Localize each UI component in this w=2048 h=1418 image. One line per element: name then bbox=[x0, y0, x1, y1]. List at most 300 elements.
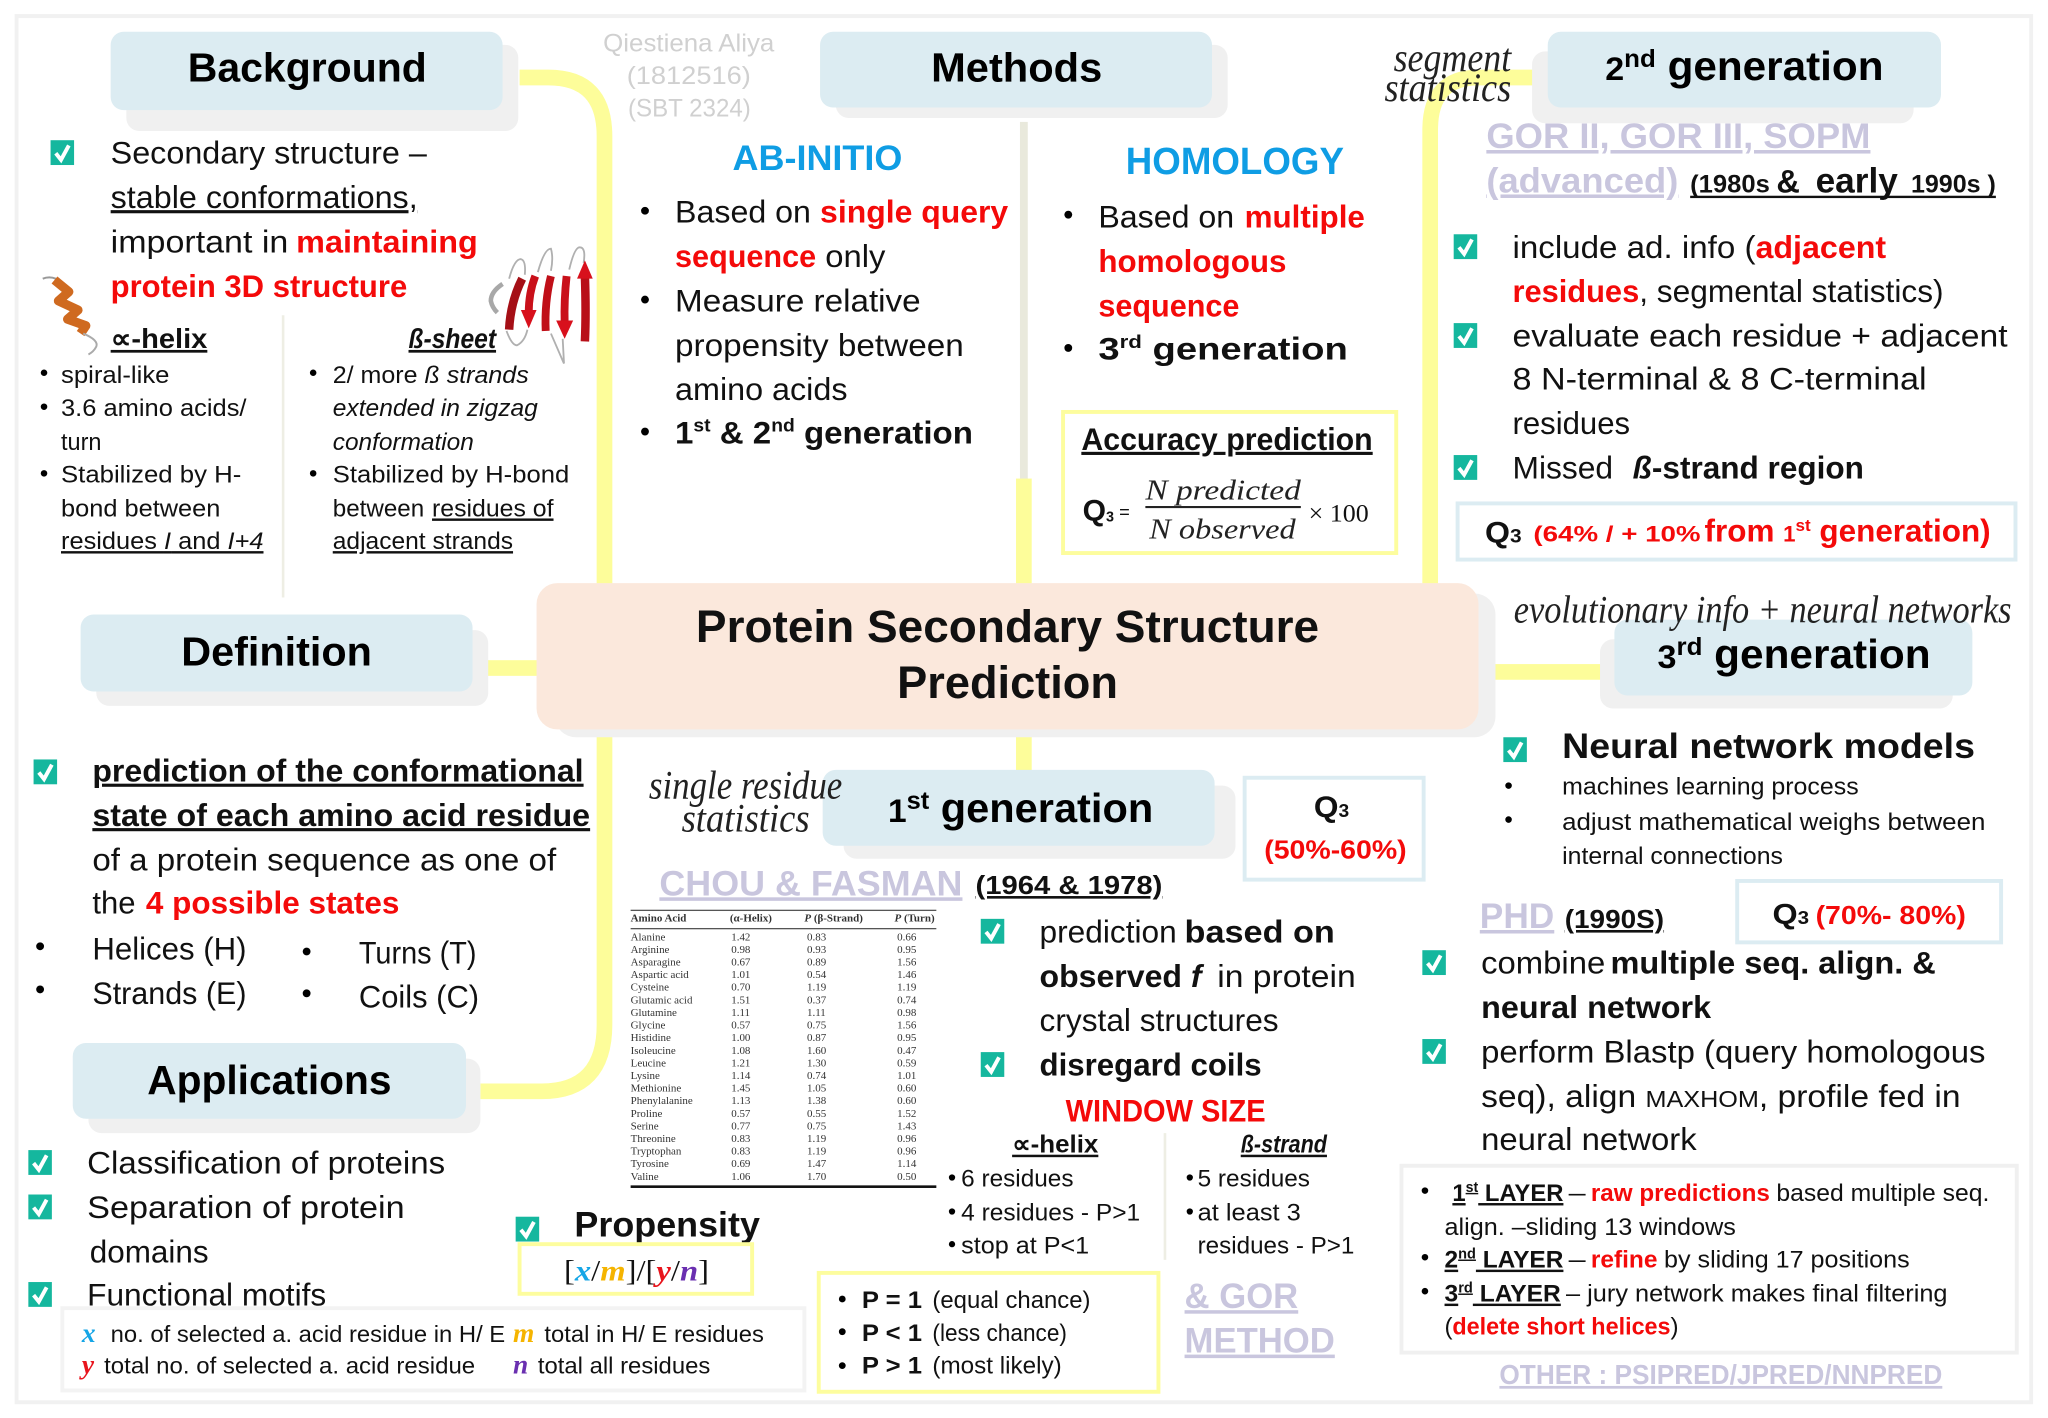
connector: background to centre bbox=[520, 77, 604, 587]
table: amino acid propensities: 0.95 bbox=[897, 1032, 917, 1044]
callout: Q3 PHD: Q3 bbox=[1772, 899, 1809, 931]
window size: beta strand: ß-strand bbox=[1241, 1132, 1328, 1159]
method names: GOR: early bbox=[1816, 161, 1898, 200]
callout: Q3 second generation bbox=[1458, 503, 2015, 560]
ab-initio column: & 2 bbox=[711, 415, 771, 450]
table: amino acid propensities: 1.19 bbox=[897, 982, 917, 994]
text block: secondary structure: protein 3D structure bbox=[111, 269, 407, 304]
table: amino acid propensities: 0.95 bbox=[897, 944, 917, 956]
table: amino acid propensities: 1.43 bbox=[897, 1120, 917, 1132]
window size: alpha helix bbox=[949, 1132, 1140, 1259]
table: amino acid propensities: 1.56 bbox=[897, 1020, 917, 1032]
connector: applications to centre bbox=[480, 724, 604, 1091]
table: amino acid propensities: Tyrosine bbox=[631, 1158, 669, 1170]
table: amino acid propensities: 0.74 bbox=[807, 1070, 827, 1082]
script note: segment statistics bbox=[1384, 35, 1513, 110]
table: amino acid propensities: Threonine bbox=[631, 1133, 676, 1145]
beta sheet column: ß-sheet bbox=[409, 323, 498, 354]
table: amino acid propensities: 1.06 bbox=[731, 1171, 751, 1183]
window size: alpha helix: 6 residues bbox=[961, 1166, 1074, 1193]
panel: network layers: delete short helices bbox=[1452, 1313, 1671, 1340]
icon: checkbox bbox=[1454, 234, 1477, 259]
alpha helix column: Stabilized by H- bbox=[61, 461, 241, 488]
panel: network layers: LAYER bbox=[1473, 1281, 1561, 1308]
callout: P value meaning: P = 1 bbox=[862, 1287, 922, 1314]
legend: propensity variables: total no. of selected a. acid residue bbox=[104, 1352, 475, 1378]
alpha helix column bbox=[41, 323, 264, 555]
callout: accuracy prediction: N observed bbox=[1148, 514, 1296, 546]
beta sheet column: residues of bbox=[432, 495, 554, 522]
ab-initio column: only bbox=[825, 239, 886, 274]
text block: applications list: Classification of proteins bbox=[87, 1146, 445, 1181]
text block: first generation points: observed f bbox=[1040, 959, 1205, 994]
panel: network layers: rd bbox=[1458, 1280, 1473, 1296]
text block: definition: prediction of the conformational bbox=[92, 754, 584, 789]
text block: applications list: domains bbox=[90, 1234, 209, 1269]
table: amino acid propensities: Phenylalanine bbox=[631, 1095, 693, 1107]
ab-initio column: propensity between bbox=[675, 328, 964, 363]
callout: P value meaning: P > 1 bbox=[862, 1352, 922, 1379]
method names: GOR method bbox=[1185, 1277, 1335, 1361]
icon: checkbox bbox=[51, 140, 74, 165]
panel: network layers: LAYER bbox=[1478, 1180, 1563, 1207]
text block: PHD points: neural network bbox=[1481, 990, 1712, 1025]
method names: GOR: (advanced) bbox=[1486, 161, 1678, 200]
callout: P value meaning: (most likely) bbox=[932, 1352, 1062, 1379]
table: amino acid propensities: Glutamine bbox=[631, 1007, 677, 1019]
text block: applications list: Functional motifs bbox=[87, 1278, 326, 1313]
table: amino acid propensities: 1.01 bbox=[731, 969, 750, 981]
legend: propensity variables: total in H/ E residues bbox=[544, 1321, 764, 1347]
beta sheet column: 2/ more ß strands bbox=[333, 362, 529, 389]
heading: first generation: generation bbox=[929, 785, 1153, 831]
table: amino acid propensities: 1.19 bbox=[807, 1146, 827, 1158]
table: amino acid propensities: Histidine bbox=[631, 1032, 671, 1044]
heading: second generation bbox=[1532, 32, 1941, 123]
table: amino acid propensities: 0.57 bbox=[731, 1020, 751, 1032]
panel: network layers: align. –sliding 13 windows bbox=[1445, 1214, 1736, 1241]
table: amino acid propensities: P bbox=[895, 912, 902, 924]
table: amino acid propensities: Asparagine bbox=[631, 956, 681, 968]
panel: propensity bbox=[516, 1205, 760, 1294]
window size: beta strand: 5 residues bbox=[1198, 1166, 1310, 1193]
table: amino acid propensities: 0.83 bbox=[731, 1133, 751, 1145]
panel: network layers: based multiple seq. bbox=[1776, 1180, 1989, 1207]
method names: GOR: (1980s bbox=[1690, 171, 1770, 198]
icon: checkbox bbox=[1422, 1039, 1446, 1064]
formula: propensity bbox=[520, 1244, 752, 1294]
panel: network layers: st bbox=[1466, 1180, 1478, 1196]
method names: Chou and Fasman bbox=[659, 864, 1162, 903]
table: amino acid propensities: 0.89 bbox=[807, 956, 827, 968]
text block: PHD points bbox=[1481, 946, 1985, 1157]
text block: definition: the bbox=[92, 886, 135, 921]
icon: checkbox bbox=[1503, 737, 1527, 762]
callout: Q3 second generation: generation) bbox=[1811, 513, 1991, 548]
script note: single residue statistics: single residue bbox=[649, 763, 842, 808]
author attribution bbox=[603, 30, 775, 123]
text block: neural network models: machines learning process bbox=[1562, 774, 1859, 801]
heading: second generation: generation bbox=[1656, 43, 1884, 89]
panel: network layers: raw predictions bbox=[1591, 1180, 1770, 1207]
table: amino acid propensities: 1.56 bbox=[897, 956, 917, 968]
table: amino acid propensities: 0.50 bbox=[897, 1171, 917, 1183]
text block: PHD points: perform Blastp (query homologous bbox=[1481, 1035, 1985, 1070]
table: amino acid propensities: 0.60 bbox=[897, 1083, 917, 1095]
table: amino acid propensities: 1.51 bbox=[731, 994, 750, 1006]
callout: Q3 second generation: from 1 bbox=[1705, 513, 1795, 548]
text block: applications list bbox=[87, 1146, 445, 1313]
panel: background bbox=[41, 32, 593, 597]
alpha helix column: bond between bbox=[61, 495, 220, 522]
legend: propensity variables: x bbox=[81, 1318, 96, 1348]
panel: network layers: – jury network makes final filtering bbox=[1566, 1281, 1948, 1308]
table: amino acid propensities: 0.75 bbox=[807, 1020, 827, 1032]
central title panel bbox=[537, 583, 1495, 737]
table: amino acid propensities: 1.13 bbox=[731, 1095, 751, 1107]
icon: checkbox bbox=[1454, 323, 1477, 348]
text block: second generation points: , segmental statistics) bbox=[1639, 274, 1944, 309]
callout: P value meaning: (less chance) bbox=[932, 1320, 1067, 1347]
text block: PHD points: multiple seq. align. & bbox=[1610, 946, 1936, 981]
legend: propensity variables: total all residues bbox=[538, 1352, 710, 1378]
callout: P value meaning: P < 1 bbox=[862, 1320, 922, 1347]
window size: alpha helix: 4 residues - P>1 bbox=[961, 1200, 1140, 1227]
table: amino acid propensities: 0.60 bbox=[897, 1095, 917, 1107]
callout: accuracy prediction: N predicted bbox=[1144, 474, 1302, 506]
ab-initio column bbox=[641, 139, 1009, 450]
ab-initio column: Based on bbox=[675, 195, 811, 230]
table: amino acid propensities: 1.14 bbox=[897, 1158, 917, 1170]
table: amino acid propensities: 1.52 bbox=[897, 1108, 916, 1120]
table: amino acid propensities: 1.21 bbox=[731, 1057, 750, 1069]
callout: accuracy prediction bbox=[1063, 412, 1396, 553]
table: amino acid propensities: 1.38 bbox=[807, 1095, 827, 1107]
homology column: 3 bbox=[1098, 332, 1116, 367]
table: amino acid propensities: 1.60 bbox=[807, 1045, 827, 1057]
callout: accuracy prediction: 3 bbox=[1106, 510, 1114, 526]
method names: GOR method: METHOD bbox=[1185, 1322, 1335, 1361]
panel: network layers: 2 bbox=[1445, 1247, 1458, 1274]
panel: first generation bbox=[631, 763, 1424, 1392]
ab-initio column: sequence bbox=[675, 239, 816, 274]
table: amino acid propensities: 0.87 bbox=[807, 1032, 827, 1044]
table: amino acid propensities: Methionine bbox=[631, 1083, 681, 1095]
panel: second generation bbox=[1384, 32, 2015, 560]
homology column: Based on bbox=[1098, 200, 1234, 235]
icon: checkbox bbox=[34, 759, 57, 784]
panel: methods bbox=[641, 32, 1396, 553]
text block: second generation points: residues bbox=[1512, 406, 1630, 441]
icon: checkbox bbox=[1454, 455, 1477, 480]
table: amino acid propensities: Lysine bbox=[631, 1070, 660, 1082]
ab-initio column: 1 bbox=[675, 415, 692, 450]
table: amino acid propensities: Tryptophan bbox=[631, 1146, 682, 1158]
beta sheet column bbox=[310, 323, 569, 555]
script note: segment statistics: segment bbox=[1394, 35, 1513, 80]
table: amino acid propensities: 0.55 bbox=[807, 1108, 827, 1120]
icon: checkbox bbox=[981, 919, 1004, 944]
author attribution: Qiestiena Aliya bbox=[603, 30, 775, 57]
list: four states: Helices (H) bbox=[92, 931, 247, 966]
legend: propensity variables: no. of selected a. acid residue in H/ E bbox=[111, 1321, 505, 1347]
table: amino acid propensities: (α-Helix) bbox=[730, 912, 772, 924]
table: amino acid propensities: 1.46 bbox=[897, 969, 917, 981]
formula: propensity: [x/m]/[y/n] bbox=[564, 1255, 709, 1288]
table: amino acid propensities: 0.93 bbox=[807, 944, 827, 956]
callout: Q3 first generation: (50%-60%) bbox=[1264, 835, 1407, 865]
legend: propensity variables: y bbox=[79, 1349, 95, 1379]
label: propensity: Propensity bbox=[574, 1205, 760, 1244]
table: amino acid propensities: 0.74 bbox=[897, 994, 917, 1006]
table: amino acid propensities: 1.08 bbox=[731, 1045, 751, 1057]
homology column bbox=[1064, 141, 1365, 367]
icon: checkbox bbox=[28, 1282, 52, 1307]
beta sheet column: adjacent strands bbox=[333, 528, 513, 555]
panel: definition bbox=[34, 614, 590, 1015]
text block: definition bbox=[92, 754, 590, 921]
text block: first generation points: based on bbox=[1185, 914, 1335, 949]
table: amino acid propensities: P bbox=[804, 912, 811, 924]
table: amino acid propensities: Alanine bbox=[631, 931, 665, 943]
panel: network layers: nd bbox=[1458, 1247, 1476, 1263]
text block: first generation points: in protein bbox=[1217, 959, 1356, 994]
panel: network layers bbox=[1401, 1166, 2017, 1353]
beta sheet column: Stabilized by H-bond bbox=[333, 461, 569, 488]
table: amino acid propensities: Serine bbox=[631, 1120, 659, 1132]
callout: P value meaning: (equal chance) bbox=[932, 1287, 1090, 1314]
text block: secondary structure: important in bbox=[111, 225, 288, 260]
ab-initio column: AB-INITIO bbox=[733, 139, 902, 178]
method names: GOR bbox=[1486, 117, 1996, 200]
method names: GOR method: & GOR bbox=[1185, 1277, 1298, 1316]
method names: GOR: & bbox=[1776, 162, 1800, 199]
text block: secondary structure bbox=[111, 136, 478, 304]
method name: PHD: (1990S) bbox=[1565, 904, 1664, 934]
ab-initio column: nd bbox=[771, 415, 795, 436]
table: amino acid propensities: 0.77 bbox=[731, 1120, 751, 1132]
icon: checkbox bbox=[1422, 950, 1446, 975]
connector: third generation to centre bbox=[1489, 664, 1613, 680]
text block: first generation points bbox=[1040, 914, 1356, 1083]
heading: background: Background bbox=[188, 44, 427, 90]
table: amino acid propensities: 1.11 bbox=[807, 1007, 826, 1019]
heading: third generation: 3 bbox=[1658, 638, 1676, 675]
table: amino acid propensities: 1.11 bbox=[731, 1007, 750, 1019]
heading: first generation: st bbox=[907, 788, 929, 815]
panel: network layers: LAYER bbox=[1476, 1247, 1563, 1274]
window size: beta strand: residues - P>1 bbox=[1198, 1232, 1354, 1259]
alpha helix column: spiral-like bbox=[61, 362, 169, 389]
panel: network layers: by sliding 17 positions bbox=[1664, 1247, 1910, 1274]
list: four states: Turns (T) bbox=[359, 935, 476, 970]
heading: third generation bbox=[1600, 620, 1972, 709]
table: amino acid propensities: Glycine bbox=[631, 1020, 665, 1032]
table: amino acid propensities: 0.47 bbox=[897, 1045, 917, 1057]
heading: second generation: 2 bbox=[1605, 50, 1624, 87]
homology column: generation bbox=[1142, 332, 1348, 367]
table: amino acid propensities: Leucine bbox=[631, 1057, 666, 1069]
homology column: sequence bbox=[1098, 289, 1239, 324]
panel: network layers: 3 bbox=[1445, 1281, 1458, 1308]
text block: second generation points: include ad. info ( bbox=[1512, 230, 1756, 265]
icon: checkbox bbox=[28, 1150, 52, 1175]
homology column: rd bbox=[1120, 331, 1142, 352]
icon: checkbox bbox=[28, 1195, 52, 1219]
text block: secondary structure: stable conformations, bbox=[111, 180, 418, 215]
legend: propensity variables: n bbox=[513, 1349, 528, 1379]
alpha helix column: residues I and I+4 bbox=[61, 528, 264, 555]
callout: accuracy prediction: Q bbox=[1083, 494, 1106, 527]
table: amino acid propensities: 0.57 bbox=[731, 1108, 751, 1120]
callout: Q3 second generation: (64% / + 10% bbox=[1533, 521, 1701, 546]
beta sheet column: extended in zigzag bbox=[333, 395, 538, 422]
table: amino acid propensities: 0.37 bbox=[807, 994, 827, 1006]
window size: alpha helix: ∝-helix bbox=[1012, 1132, 1099, 1159]
panel: network layers: – bbox=[1569, 1247, 1586, 1274]
text block: definition: 4 possible states bbox=[146, 886, 399, 921]
callout: Q3 second generation: st bbox=[1796, 516, 1811, 535]
icon: checkbox bbox=[516, 1217, 539, 1242]
callout: accuracy prediction: × 100 bbox=[1309, 501, 1369, 528]
ab-initio column: st bbox=[693, 415, 711, 436]
script note: segment statistics: statistics bbox=[1384, 65, 1511, 110]
callout: Q3 first generation bbox=[1245, 778, 1424, 880]
method names: GOR: 1990s ) bbox=[1911, 171, 1996, 198]
method names: other: OTHER : PSIPRED/JPRED/NNPRED bbox=[1499, 1359, 1942, 1390]
method names: Chou and Fasman: CHOU & FASMAN bbox=[659, 864, 962, 903]
connector: methods divider bbox=[1016, 122, 1032, 774]
text block: neural network models: internal connections bbox=[1562, 843, 1783, 870]
callout: Q3 PHD: (70%- 80%) bbox=[1816, 900, 1966, 930]
table: amino acid propensities: 1.42 bbox=[731, 931, 750, 943]
table: amino acid propensities: 0.98 bbox=[897, 1007, 917, 1019]
heading: background bbox=[111, 32, 518, 131]
alpha helix column: 3.6 amino acids/ bbox=[61, 395, 247, 422]
list: four states bbox=[36, 931, 479, 1015]
heading: third generation: rd bbox=[1676, 634, 1702, 661]
table: amino acid propensities: 1.14 bbox=[731, 1070, 751, 1082]
table: amino acid propensities: 0.67 bbox=[731, 956, 751, 968]
ab-initio column: amino acids bbox=[675, 372, 847, 407]
text block: first generation points: crystal structures bbox=[1040, 1003, 1279, 1038]
text block: neural network models: Neural network models bbox=[1562, 727, 1975, 766]
table: amino acid propensities: Amino Acid bbox=[631, 912, 686, 924]
central title panel: Protein Secondary Structure bbox=[696, 601, 1319, 652]
table: amino acid propensities: Aspartic acid bbox=[631, 969, 689, 981]
legend: propensity variables: m bbox=[513, 1318, 534, 1348]
method name: PHD: PHD bbox=[1480, 897, 1554, 936]
text block: PHD points: seq), align MAXHOM , profile fed in bbox=[1481, 1079, 1961, 1114]
method name: PHD bbox=[1480, 897, 1664, 936]
table: amino acid propensities: Valine bbox=[631, 1171, 659, 1183]
heading: second generation: nd bbox=[1624, 46, 1656, 73]
table: amino acid propensities: (Turn) bbox=[901, 912, 935, 924]
table: amino acid propensities: 0.96 bbox=[897, 1133, 917, 1145]
alpha helix column: ∝-helix bbox=[111, 323, 208, 354]
homology column: HOMOLOGY bbox=[1126, 141, 1344, 183]
heading: applications: Applications bbox=[147, 1057, 392, 1103]
text block: PHD points: neural network bbox=[1481, 1122, 1697, 1157]
table: amino acid propensities: 1.01 bbox=[897, 1070, 916, 1082]
text block: first generation points: prediction bbox=[1040, 914, 1177, 949]
table: amino acid propensities: Isoleucine bbox=[631, 1045, 676, 1057]
table: amino acid propensities: Cysteine bbox=[631, 982, 669, 994]
beta sheet column: between bbox=[333, 495, 424, 522]
alpha helix column: turn bbox=[61, 429, 102, 456]
text block: neural network models bbox=[1505, 727, 1985, 870]
table: amino acid propensities: 1.19 bbox=[807, 1133, 827, 1145]
text block: second generation points: residues bbox=[1512, 274, 1639, 309]
list: four states: Coils (C) bbox=[359, 980, 479, 1015]
text block: definition: state of each amino acid residue bbox=[92, 798, 590, 833]
author attribution: (1812516) bbox=[627, 63, 751, 90]
table: amino acid propensities: 0.75 bbox=[807, 1120, 827, 1132]
beta sheet column: conformation bbox=[333, 429, 474, 456]
ab-initio column: generation bbox=[795, 415, 973, 450]
ab-initio column: single query bbox=[820, 195, 1009, 230]
icon: alpha helix bbox=[43, 277, 97, 354]
connector: second generation to centre bbox=[1430, 77, 1548, 587]
panel: network layers: ( bbox=[1445, 1313, 1453, 1340]
text block: applications list: Separation of protein bbox=[87, 1190, 405, 1225]
table: amino acid propensities: 1.30 bbox=[807, 1057, 827, 1069]
text block: second generation points: ß-strand region bbox=[1633, 451, 1864, 486]
text block: neural network models: adjust mathematical weighs between bbox=[1562, 809, 1985, 836]
homology column: homologous bbox=[1098, 244, 1286, 279]
heading: methods bbox=[820, 32, 1228, 118]
panel: network layers: refine bbox=[1591, 1247, 1658, 1274]
window size: alpha helix: stop at P<1 bbox=[961, 1232, 1089, 1259]
author attribution: (SBT 2324) bbox=[628, 96, 751, 123]
panel: network layers: – bbox=[1569, 1180, 1586, 1207]
text block: first generation points: disregard coils bbox=[1040, 1048, 1262, 1083]
table: amino acid propensities: 0.83 bbox=[807, 931, 827, 943]
text block: secondary structure: Secondary structure – bbox=[111, 136, 427, 171]
table: amino acid propensities: (β-Strand) bbox=[811, 912, 863, 924]
table: amino acid propensities: 0.54 bbox=[807, 969, 827, 981]
heading: methods: Methods bbox=[931, 44, 1102, 90]
callout: Q3 PHD bbox=[1737, 881, 2001, 942]
table: amino acid propensities: Glutamic acid bbox=[631, 994, 693, 1006]
table: amino acid propensities: Arginine bbox=[631, 944, 670, 956]
text block: second generation points: Missed bbox=[1512, 451, 1613, 486]
table: amino acid propensities: 1.05 bbox=[807, 1083, 827, 1095]
callout: accuracy prediction: Accuracy prediction bbox=[1081, 422, 1373, 457]
text block: second generation points bbox=[1512, 230, 2008, 486]
text block: definition: of a protein sequence as one of bbox=[92, 843, 556, 878]
panel: applications bbox=[28, 1043, 480, 1313]
table: amino acid propensities: 1.00 bbox=[731, 1032, 751, 1044]
table: amino acid propensities: 0.59 bbox=[897, 1057, 917, 1069]
heading: definition: Definition bbox=[181, 628, 372, 674]
table: amino acid propensities: 0.69 bbox=[731, 1158, 751, 1170]
text block: second generation points: adjacent bbox=[1755, 230, 1887, 265]
ab-initio column: Measure relative bbox=[675, 283, 921, 318]
icon: beta sheet bbox=[491, 247, 593, 364]
table: amino acid propensities: Proline bbox=[631, 1108, 662, 1120]
table: amino acid propensities: 0.70 bbox=[731, 982, 751, 994]
window size: beta strand: at least 3 bbox=[1198, 1200, 1301, 1227]
heading: third generation: generation bbox=[1702, 631, 1931, 677]
callout: Q3 second generation: Q3 bbox=[1485, 517, 1522, 550]
list: four states: Strands (E) bbox=[92, 976, 247, 1011]
method names: Chou and Fasman: (1964 & 1978) bbox=[976, 870, 1162, 900]
heading: first generation bbox=[823, 770, 1236, 859]
icon: checkbox bbox=[981, 1052, 1004, 1077]
heading: window size: WINDOW SIZE bbox=[1066, 1093, 1266, 1128]
heading: definition bbox=[81, 614, 488, 706]
